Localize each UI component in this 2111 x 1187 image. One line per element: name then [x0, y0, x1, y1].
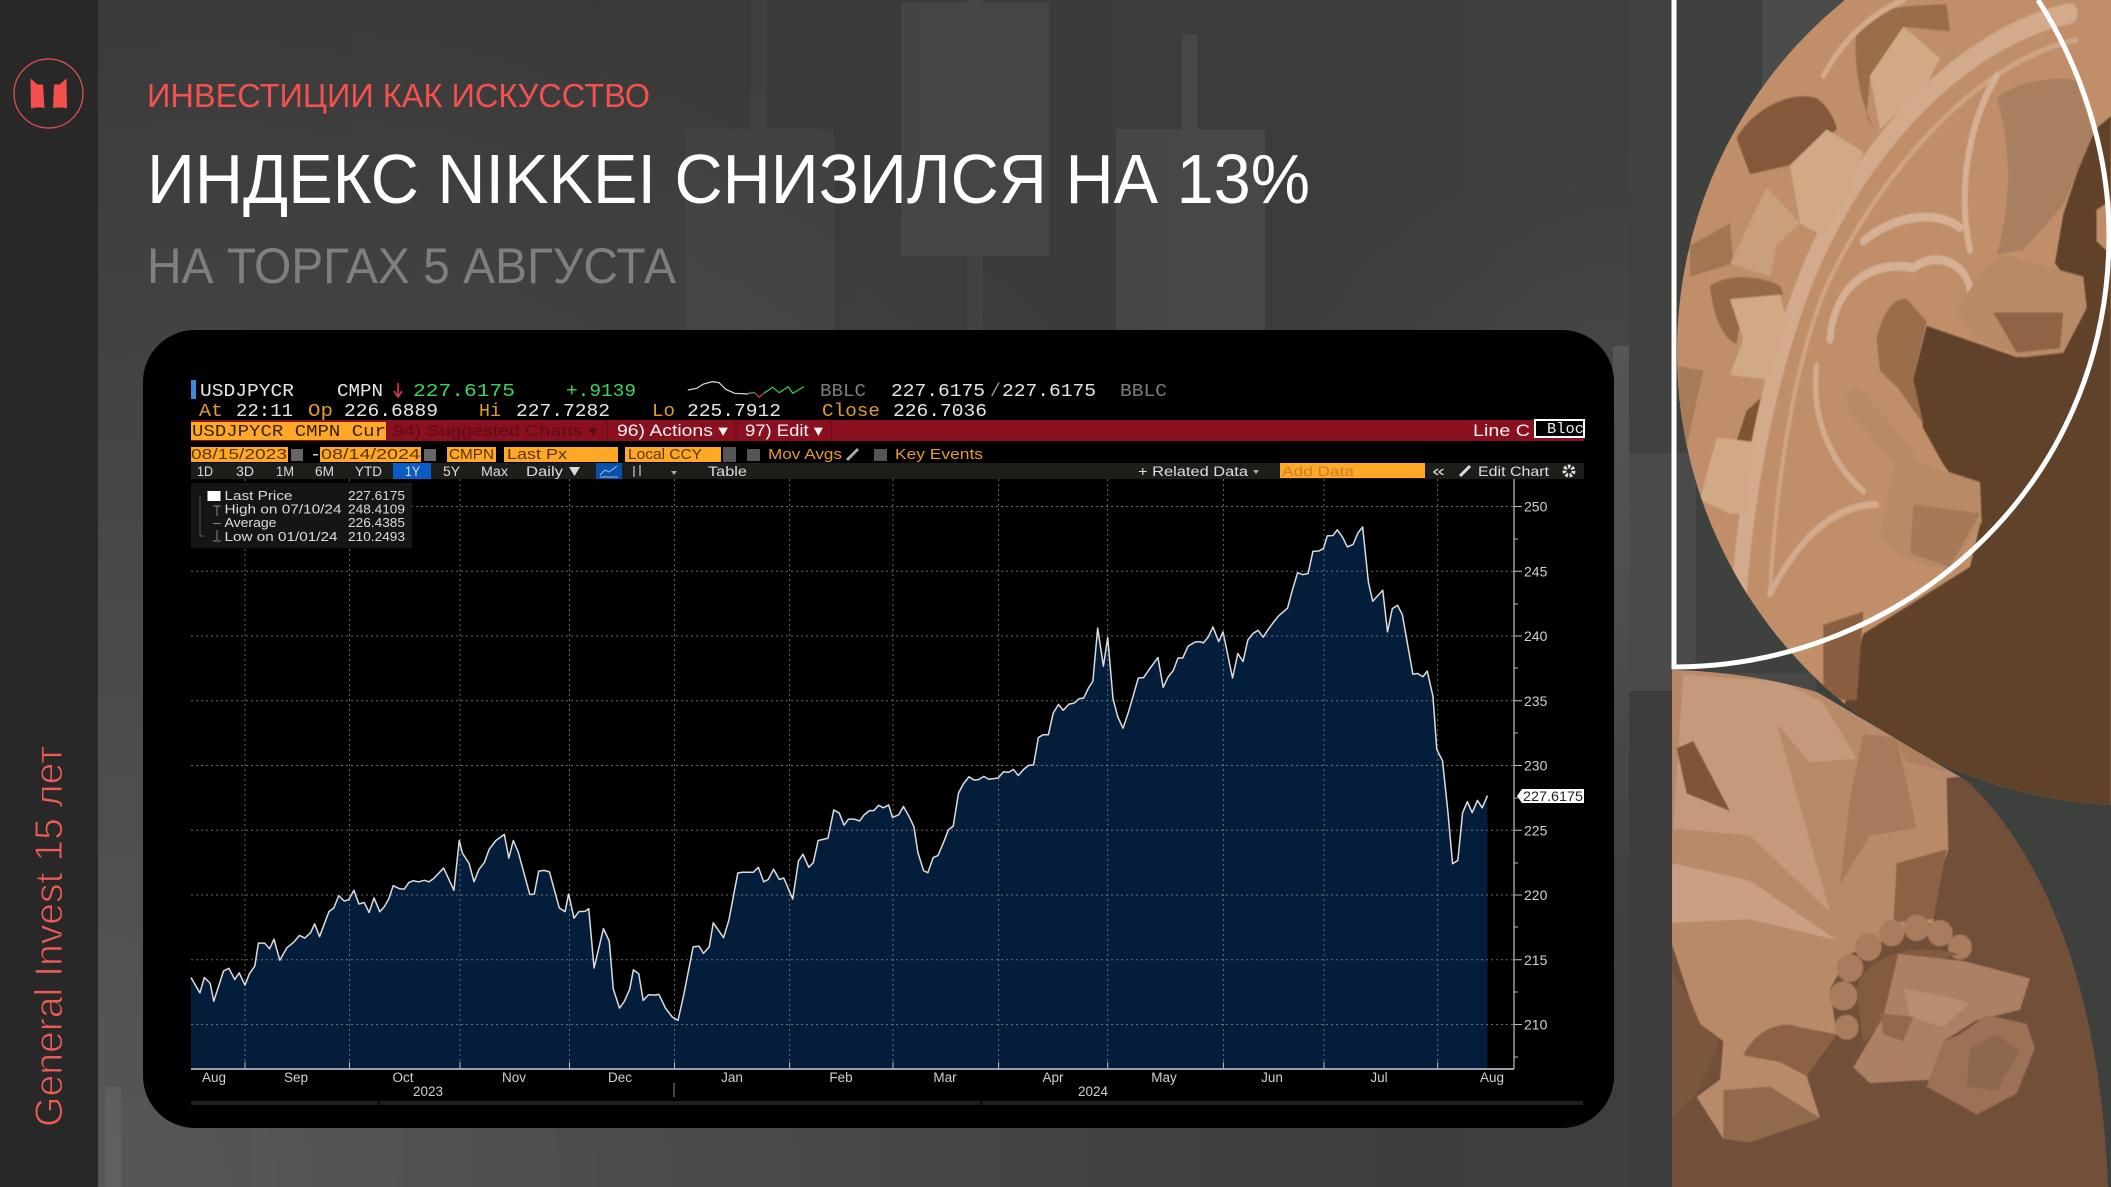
chart toolbar [191, 463, 1584, 480]
terminal quote row 1 [191, 380, 1167, 402]
light stone mass [1672, 670, 1961, 1139]
background candlesticks [105, 0, 1265, 1187]
x axis [191, 1062, 1583, 1103]
x axis: Nov [502, 1070, 526, 1085]
terminal quote row 2: Close [822, 402, 880, 422]
terminal quote row 1: 227.6175 [891, 382, 985, 402]
subtitle: НА ТОРГАХ 5 АВГУСТА [147, 238, 677, 294]
red command bar [191, 420, 1584, 442]
chart toolbar: 1Y [405, 464, 420, 479]
x axis: Jul [1370, 1070, 1388, 1085]
white arc frame [1674, 0, 2109, 667]
chart toolbar: Edit Chart [1478, 464, 1549, 479]
title: ИНДЕКС NIKKEI СНИЗИЛСЯ НА 13% [147, 140, 1310, 218]
terminal quote row 2: At [199, 402, 223, 422]
terminal quote row 1: 227.6175 [413, 382, 515, 402]
terminal quote row 2: Hi [479, 402, 501, 422]
y axis: 210 [1524, 1016, 1548, 1032]
chart legend: 248.4109 [348, 502, 405, 516]
last price tag: 227.6175 [1523, 789, 1583, 804]
chart legend: High on 07/10/24 [224, 502, 342, 516]
x axis: Dec [608, 1070, 632, 1085]
red command bar: 97) Edit ▾ [745, 422, 824, 440]
terminal quote row 1: 227.6175 [1002, 382, 1096, 402]
date and field row: Key Events [895, 446, 983, 463]
x axis: Apr [1042, 1070, 1064, 1085]
stone fingers [1948, 270, 2088, 526]
chart toolbar: YTD [355, 464, 382, 479]
shadow shapes [1737, 96, 1837, 174]
chart toolbar: 1M [276, 464, 294, 479]
chart toolbar: + Related Data [1138, 464, 1249, 479]
y axis: 230 [1524, 758, 1548, 774]
date and field row: 08/15/2023 [191, 446, 287, 463]
price line [191, 527, 1487, 1020]
beaded ring [1829, 915, 1972, 1040]
x axis: Jun [1261, 1070, 1283, 1085]
terminal quote row 1: USDJPYCR [200, 382, 294, 402]
chart toolbar: « [1432, 463, 1445, 480]
date and field row: Local CCY [628, 446, 702, 463]
chart legend: Last Price [224, 489, 293, 503]
chart toolbar: 1D [197, 464, 213, 479]
x axis: Sep [284, 1070, 308, 1085]
terminal quote row 2: 226.6889 [344, 402, 438, 422]
x axis: Oct [392, 1070, 414, 1085]
date and field row: Last Px [507, 446, 568, 463]
chart toolbar: Daily [526, 464, 563, 479]
date and field row: 08/14/2024 [321, 446, 420, 463]
date and field row [191, 446, 983, 463]
x axis: Mar [933, 1070, 957, 1085]
hexagonal boss [1927, 1015, 2035, 1115]
terminal quote row 1: BBLC [1120, 382, 1167, 402]
x axis: Jan [721, 1070, 743, 1085]
dark void [1817, 116, 2111, 810]
y axis: 235 [1524, 693, 1548, 709]
terminal quote row 2: Op [308, 402, 333, 422]
date and field row: CMPN [449, 446, 494, 463]
chart legend: 210.2493 [348, 530, 405, 544]
area chart: USDJPY 1Y [191, 479, 1514, 1069]
y axis: 225 [1524, 822, 1548, 838]
terminal quote row 2 [199, 402, 987, 422]
terminal quote row 1: +.9139 [566, 382, 636, 402]
chart legend: 227.6175 [348, 489, 405, 503]
x axis: Aug [1480, 1070, 1504, 1085]
red command bar: 96) Actions ▾ [617, 422, 729, 440]
grid lines [191, 479, 1514, 1068]
beast head [1853, 954, 2030, 1083]
terminal quote row 1: CMPN [337, 382, 383, 402]
y axis: 215 [1524, 952, 1548, 968]
terminal quote row 2: 226.7036 [893, 402, 987, 422]
icon: logo [14, 59, 83, 128]
x axis: Feb [829, 1070, 853, 1085]
chart legend: Low on 01/01/24 [224, 530, 338, 544]
chart toolbar: 6M [315, 464, 334, 479]
red command bar: USDJPYCR CMPN Cur [192, 423, 386, 442]
leaf carvings [1700, 27, 1940, 513]
x axis: May [1151, 1070, 1177, 1085]
y axis: 245 [1524, 563, 1548, 579]
red command bar: Line C [1473, 421, 1530, 440]
panel: terminal chart [143, 330, 1614, 1128]
terminal quote row 2: 225.7912 [687, 402, 781, 422]
terminal quote row 2: Lo [652, 402, 675, 422]
terminal quote row 2: 22:11 [236, 402, 293, 422]
chart legend: Average [224, 516, 277, 530]
chart toolbar: Table [708, 464, 747, 479]
shadows [1677, 741, 1730, 811]
chart toolbar: 5Y [443, 464, 460, 479]
red command bar: 94) Suggested Charts ▾ [393, 423, 598, 440]
highlights [1673, 675, 1857, 912]
stone fingers upper [1898, 740, 1950, 772]
red command bar: Bloc [1547, 421, 1584, 438]
terminal quote row 2: 227.7282 [516, 402, 610, 422]
chart legend: 226.4385 [348, 516, 405, 530]
terminal quote row 1: BBLC [820, 382, 866, 402]
y axis: 240 [1524, 628, 1548, 644]
y axis [1514, 479, 1548, 1069]
vertical brand text: General Invest 15 лет [28, 746, 71, 1127]
x axis: Aug [202, 1070, 226, 1085]
chart toolbar: Add Data [1282, 464, 1355, 479]
date and field row: Mov Avgs [768, 446, 842, 463]
main ribs [1738, 0, 2077, 603]
left sidebar [0, 0, 98, 1187]
x axis: 2023 [413, 1084, 443, 1099]
chart toolbar: 3D [236, 464, 254, 479]
y axis: 220 [1524, 887, 1548, 903]
chart legend [191, 483, 412, 548]
eyebrow heading: ИНВЕСТИЦИИ КАК ИСКУССТВО [147, 77, 650, 114]
chart toolbar: Max [481, 464, 508, 479]
x axis: 2024 [1078, 1084, 1109, 1099]
photo: stone tracery, lower disc [1672, 660, 2111, 1187]
photo: stone tracery, upper disc [1670, 0, 2111, 810]
y axis: 250 [1524, 498, 1548, 514]
terminal quote row 1: / [990, 382, 1001, 402]
